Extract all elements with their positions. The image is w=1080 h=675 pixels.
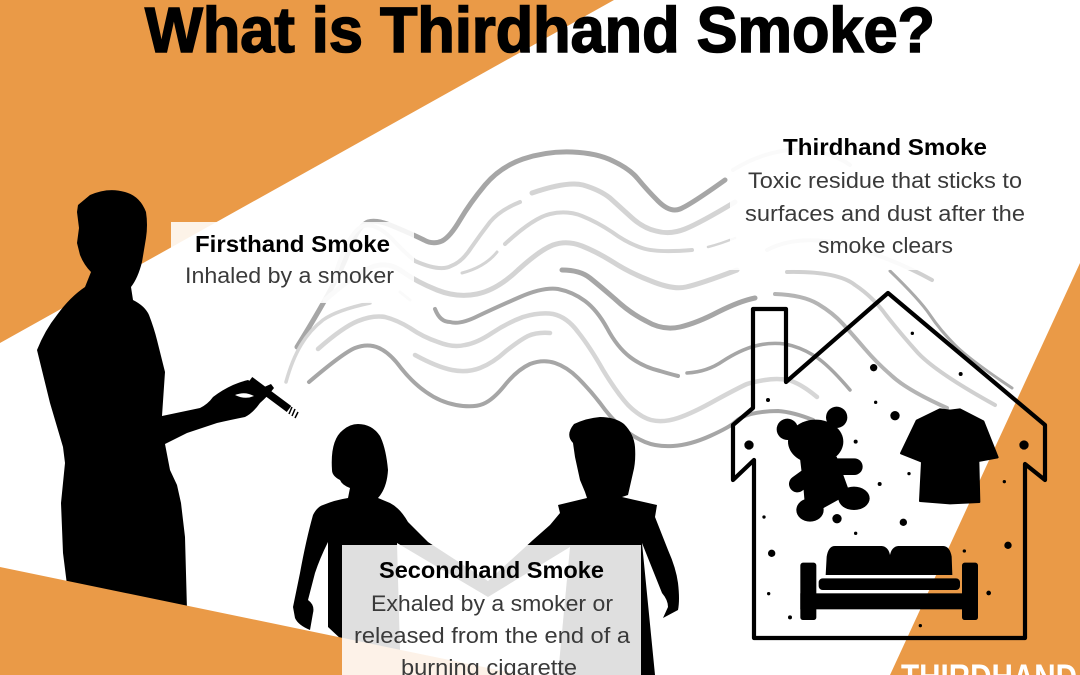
adult body bbox=[37, 190, 274, 610]
light smoke stream: middle bbox=[325, 243, 737, 300]
icon: t-shirt bbox=[901, 409, 998, 503]
silhouette: right child bbox=[488, 417, 679, 675]
light smoke stream: second high bbox=[505, 212, 692, 251]
background shape: right orange bbox=[890, 263, 1080, 675]
label: thirdhand smoke bbox=[730, 130, 1040, 270]
label panel bbox=[342, 545, 641, 675]
silhouette: left child bbox=[293, 424, 488, 675]
label description: Exhaled by a smoker or bbox=[371, 591, 614, 616]
label description: released from the end of a bbox=[354, 623, 630, 648]
dark smoke stream: centre bbox=[562, 270, 755, 328]
house contents bbox=[744, 332, 1029, 627]
label description: Toxic residue that sticks to bbox=[748, 168, 1022, 193]
label description: Inhaled by a smoker bbox=[185, 263, 395, 288]
light smoke stream: upper bbox=[333, 202, 520, 282]
light smoke stream: lower bbox=[318, 313, 817, 421]
background shape: bottom-left orange bbox=[0, 567, 522, 675]
light smoke dash right bbox=[708, 238, 735, 247]
label: secondhand smoke bbox=[342, 545, 641, 675]
smoke wisps bbox=[286, 150, 1012, 446]
cigarette bbox=[250, 380, 289, 409]
cigarette ember ticks bbox=[289, 407, 298, 418]
faint smoke arc above the house bbox=[767, 240, 932, 280]
label description bbox=[354, 591, 630, 675]
icon: teddy bear bbox=[777, 407, 870, 522]
dark smoke stream: bottom bbox=[309, 346, 813, 446]
residue dots bbox=[744, 332, 1029, 627]
house outline with chimney bbox=[733, 293, 1045, 638]
label: firsthand smoke bbox=[171, 222, 414, 303]
background shape: top-left orange bbox=[0, 0, 614, 343]
house illustration bbox=[733, 293, 1045, 638]
light smoke dash behind first label bbox=[400, 292, 410, 300]
hand gap bbox=[235, 393, 254, 398]
silhouette: adult smoker with cigarette bbox=[37, 190, 298, 610]
light smoke dash bbox=[462, 252, 497, 273]
dark smoke stream: into chimney bbox=[687, 343, 850, 390]
label panel bbox=[730, 130, 1040, 270]
dark smoke stream: top bbox=[297, 152, 725, 347]
dark smoke over roof bbox=[890, 271, 1012, 388]
light smoke short stream bbox=[415, 333, 550, 371]
light smoke stream: high bbox=[532, 184, 735, 233]
label description: smoke clears bbox=[818, 233, 953, 258]
label heading: Thirdhand Smoke bbox=[783, 134, 987, 160]
label description bbox=[745, 168, 1025, 258]
dark smoke stream: lower-centre bbox=[435, 289, 678, 376]
faint smoke behind third label bbox=[733, 150, 850, 170]
light smoke through house bbox=[787, 272, 995, 405]
gray smoke through house bbox=[775, 294, 947, 408]
label heading: Secondhand Smoke bbox=[379, 557, 604, 583]
light smoke stream: origin bbox=[286, 303, 370, 382]
label heading: Firsthand Smoke bbox=[195, 231, 390, 257]
label panel bbox=[171, 222, 414, 303]
label description: surfaces and dust after the bbox=[745, 201, 1025, 226]
icon: couch bbox=[800, 546, 978, 620]
